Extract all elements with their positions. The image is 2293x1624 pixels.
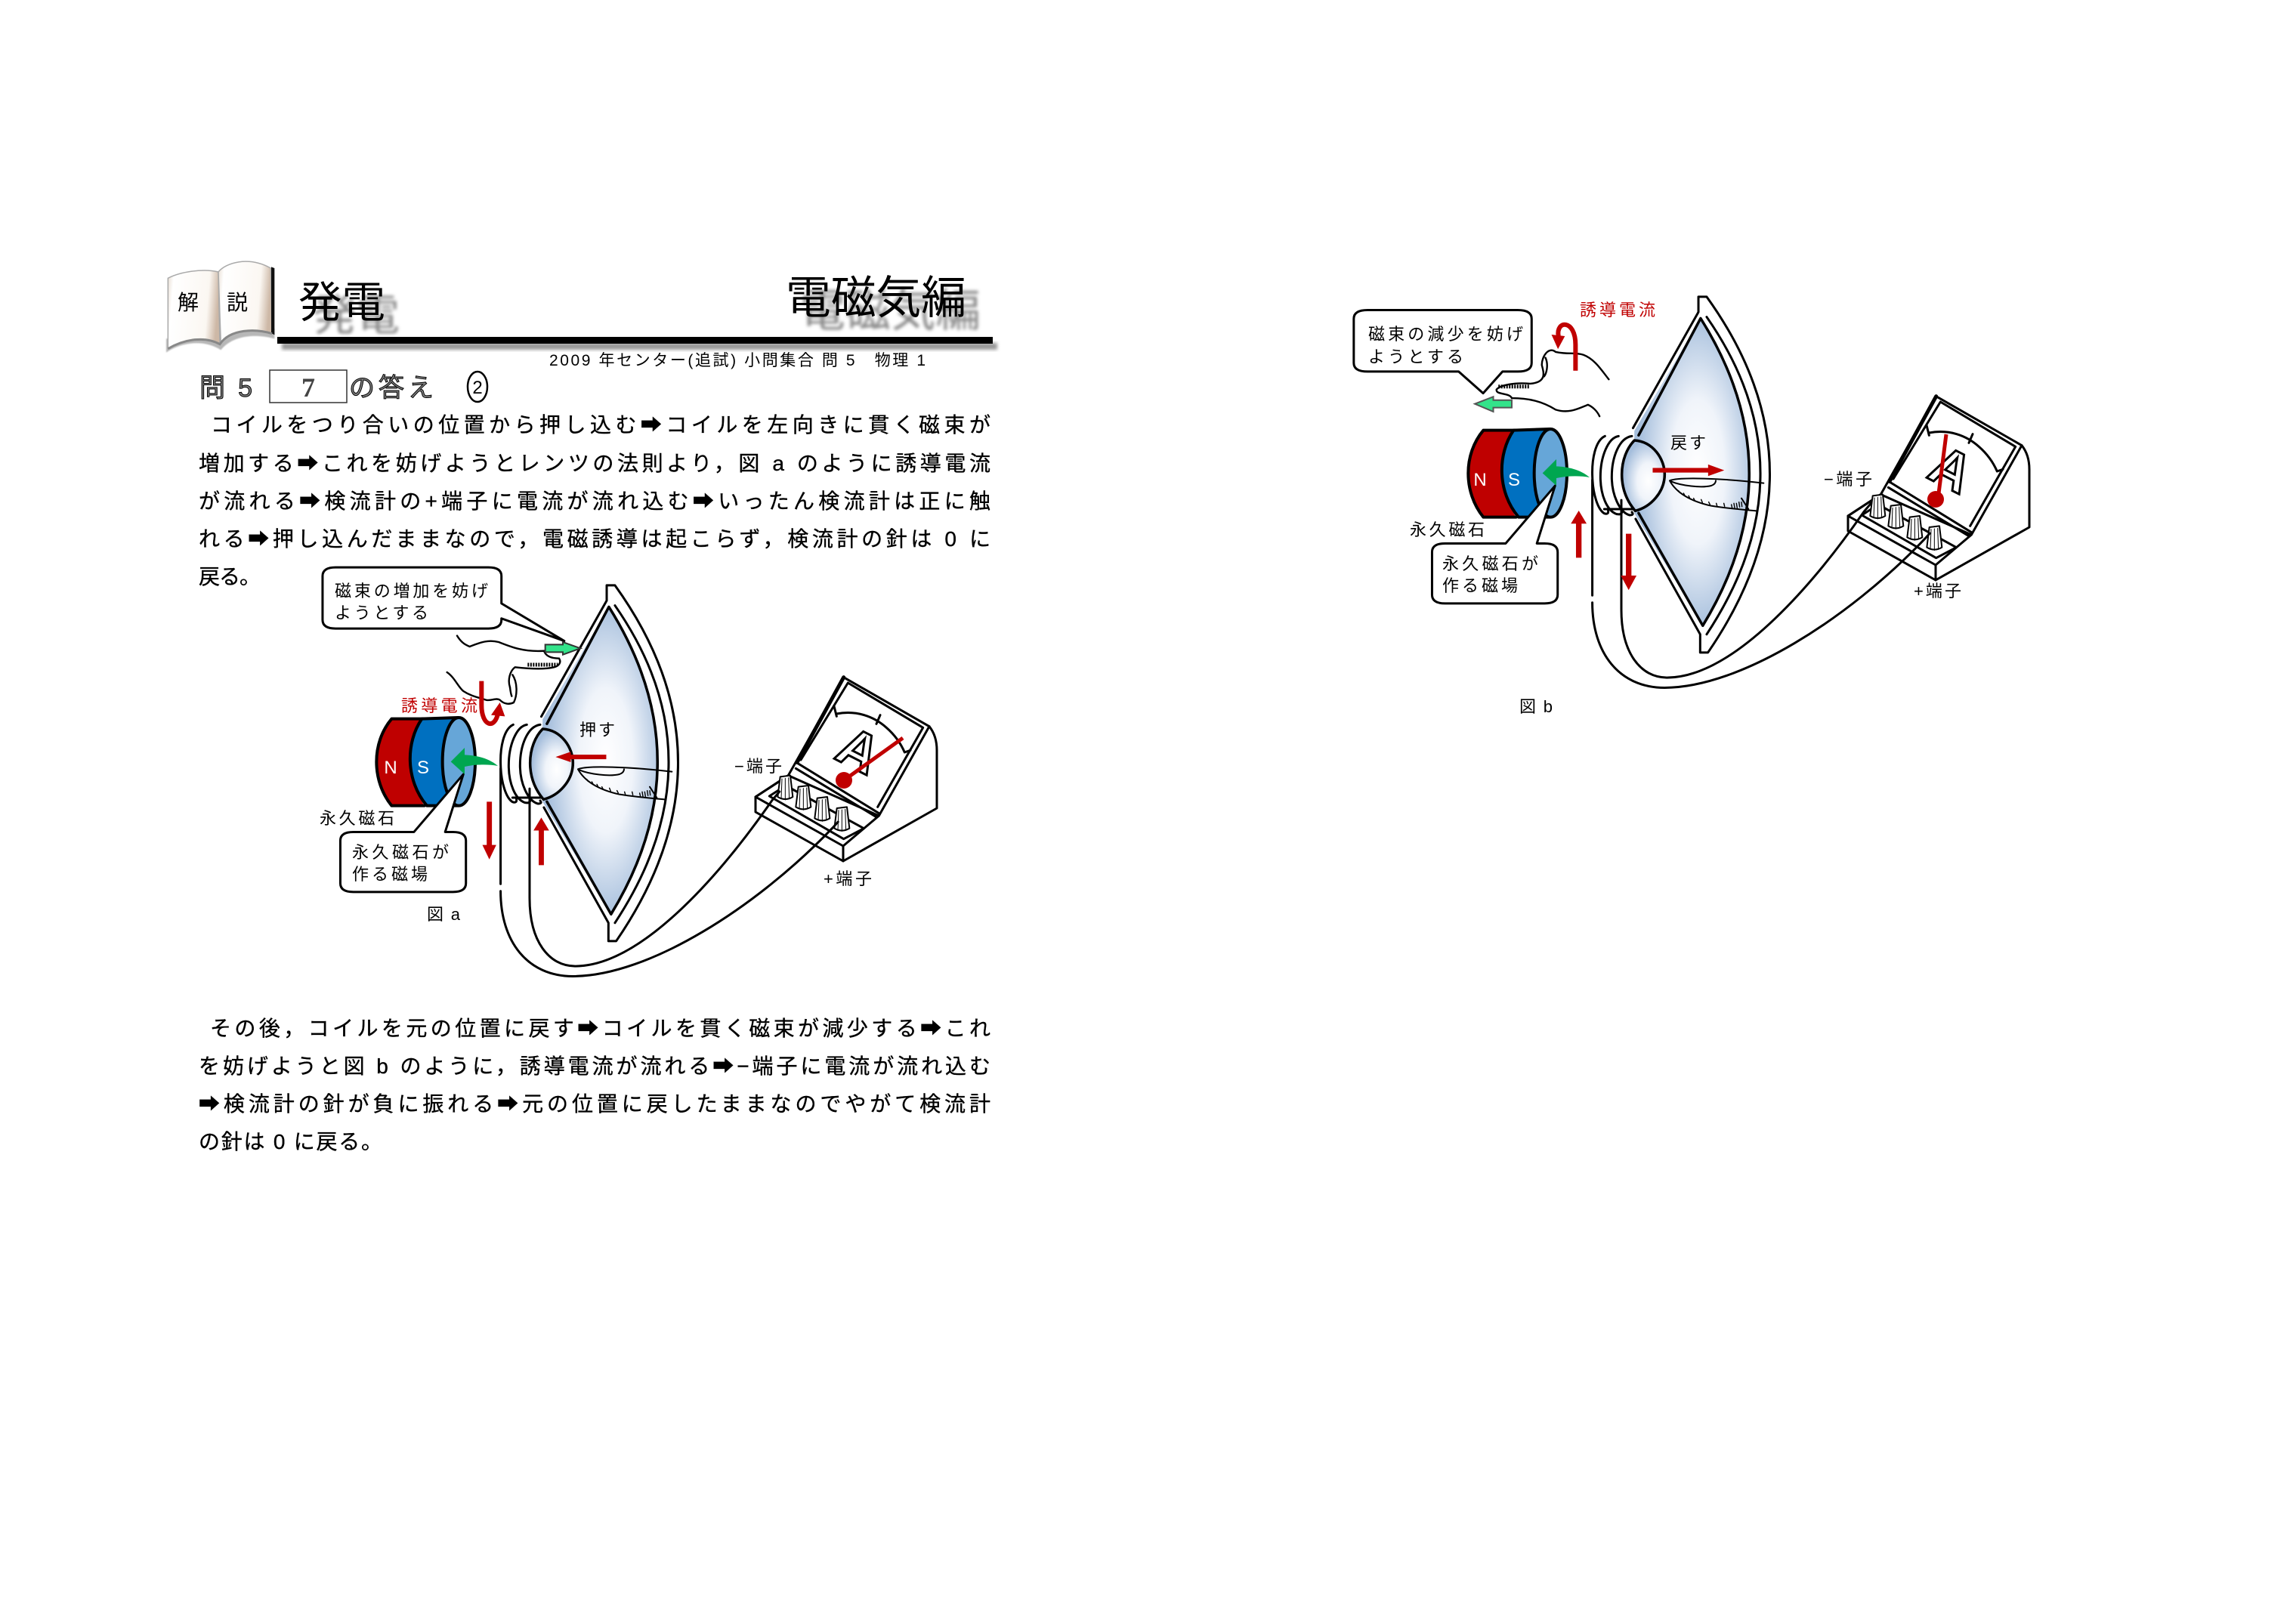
hand and induced arrows a <box>447 636 580 724</box>
labels a: N <box>384 758 397 778</box>
question heading <box>199 370 487 403</box>
labels a: +端子 <box>824 869 872 888</box>
paragraph 1: れる➡押し込んだままなので，電磁誘導は起こらず，検流計の針は 0 に <box>199 527 990 551</box>
header book icon <box>166 261 274 353</box>
question heading: 問 5 <box>199 374 252 403</box>
labels a: 永久磁石 <box>320 809 394 828</box>
labels b: 戻す <box>1670 434 1706 452</box>
hand and induced arrows b <box>1475 325 1724 590</box>
callout: flux increase <box>323 567 564 641</box>
paragraph 1: 戻る。 <box>199 565 261 588</box>
header bar <box>277 337 993 344</box>
galvanometer b <box>1848 397 2029 580</box>
paragraph 2: ➡検流計の針が負に振れる➡元の位置に戻したままなのでやがて検流計 <box>199 1092 990 1116</box>
book label 説: 説 <box>227 291 248 314</box>
question heading: 7 <box>301 372 315 403</box>
callout text a <box>335 582 488 622</box>
galvanometer a <box>756 678 937 861</box>
callout text a: ようとする <box>335 604 428 622</box>
section title shadow: 発電 <box>313 292 400 340</box>
labels a: −端子 <box>734 757 782 776</box>
chapter title shadow: 電磁気編 <box>800 286 981 336</box>
callout: flux decrease <box>1354 310 1531 394</box>
paragraph 2: を妨げようと図 b のように，誘導電流が流れる➡−端子に電流が流れ込む <box>199 1054 990 1078</box>
callout text b: ようとする <box>1368 347 1463 366</box>
source line: 2009 年センター(追試) 小問集合 問 5 物理 1 <box>549 352 926 369</box>
labels b: S <box>1508 470 1520 490</box>
galvanometer a letter: A <box>827 715 890 786</box>
section title: 発電 <box>298 279 385 327</box>
labels a: 作る磁場 <box>352 865 428 884</box>
paragraph 2 <box>199 1017 990 1153</box>
figure b <box>1354 297 2029 716</box>
question heading: 2 <box>472 378 483 398</box>
paragraph 1: が流れる➡検流計の+端子に電流が流れ込む➡いったん検流計は正に触 <box>199 489 990 513</box>
galvanometer b letter: A <box>1920 434 1982 505</box>
paragraph 2: その後，コイルを元の位置に戻す➡コイルを貫く磁束が減少する➡これ <box>210 1017 990 1040</box>
callout text b: 磁束の減少を妨げ <box>1368 325 1523 344</box>
labels b: 作る磁場 <box>1442 576 1518 595</box>
header bar shadow <box>282 343 997 350</box>
paragraph 2: の針は 0 に戻る。 <box>199 1130 382 1153</box>
apparatus a: dish, coil, wires, magnet <box>340 585 838 976</box>
paragraph 1: 増加する➡これを妨げようとレンツの法則より，図 a のように誘導電流 <box>199 452 990 475</box>
labels b: 永久磁石 <box>1410 520 1485 539</box>
labels a: S <box>417 758 429 778</box>
paragraph 1 <box>199 413 990 588</box>
labels b: 永久磁石が <box>1442 554 1538 573</box>
question heading: の答え <box>349 374 434 403</box>
apparatus b: dish, coil, wires, magnet <box>1432 297 1930 687</box>
labels a: 押す <box>579 721 615 739</box>
labels a: 誘導電流 <box>401 696 477 715</box>
book label 解: 解 <box>178 291 199 314</box>
labels b: −端子 <box>1824 470 1872 489</box>
callout text b <box>1368 325 1523 366</box>
labels a: 永久磁石が <box>352 843 449 862</box>
paragraph 1: コイルをつり合いの位置から押し込む➡コイルを左向きに貫く磁束が <box>211 413 990 437</box>
needle a <box>836 738 903 789</box>
figure a <box>320 567 937 976</box>
labels b <box>1410 301 1961 716</box>
labels a <box>320 696 872 924</box>
labels b: 図 b <box>1519 697 1553 716</box>
labels b: +端子 <box>1914 582 1961 601</box>
labels b: 誘導電流 <box>1580 301 1655 320</box>
callout text a: 磁束の増加を妨げ <box>335 582 488 601</box>
labels b: N <box>1473 470 1487 490</box>
needle b <box>1927 434 1946 508</box>
chapter title: 電磁気編 <box>786 273 966 323</box>
labels a: 図 a <box>427 905 461 924</box>
motion and current arrows a <box>482 752 606 865</box>
